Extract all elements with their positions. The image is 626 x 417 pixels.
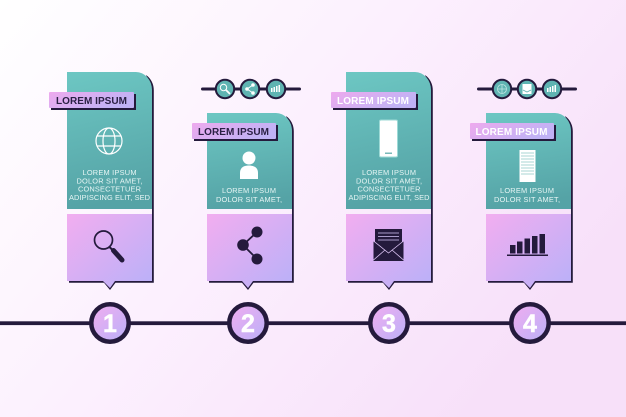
mini icon: share xyxy=(241,80,259,98)
body text 2 xyxy=(216,186,282,204)
number 2 xyxy=(229,304,267,342)
body text 4 xyxy=(494,186,560,204)
body text 3: ADIPISCING ELIT, SED xyxy=(348,193,430,202)
pink bottom 3 xyxy=(346,214,431,288)
icon: envelope xyxy=(374,229,404,261)
pink bottom 2 xyxy=(207,214,292,288)
timeline line xyxy=(0,321,626,325)
card shadow 2 xyxy=(209,116,294,290)
number 3: 3 xyxy=(382,310,396,338)
body text 1: ADIPISCING ELIT, SED xyxy=(69,193,150,202)
card shadow 1 xyxy=(69,75,154,290)
icon: magnifier xyxy=(94,231,122,260)
icon: document xyxy=(520,150,536,182)
body text 3 xyxy=(348,168,430,202)
body text 3: LOREM IPSUM xyxy=(362,168,416,177)
label 4: LOREM IPSUM xyxy=(476,127,548,138)
number 1: 1 xyxy=(103,310,117,338)
mini icon: bars xyxy=(267,80,285,98)
label 2 xyxy=(192,123,278,141)
icon: person xyxy=(240,152,258,179)
number 2: 2 xyxy=(241,310,255,338)
body text 4: LOREM IPSUM xyxy=(500,186,554,195)
body text 1: CONSECTETUER xyxy=(78,185,141,194)
mini icon: mail xyxy=(518,80,536,98)
body text 2: LOREM IPSUM xyxy=(222,186,276,195)
number 4 xyxy=(511,304,549,342)
body text 3: DOLOR SIT AMET, xyxy=(356,176,422,185)
label 2: LOREM IPSUM xyxy=(198,127,269,138)
icon: bar chart xyxy=(507,234,548,256)
panel: step 3 xyxy=(331,72,433,342)
number 4: 4 xyxy=(523,310,537,338)
label 4 xyxy=(470,123,556,141)
body text 1 xyxy=(69,168,150,202)
number 3 xyxy=(370,304,408,342)
icon: globe xyxy=(96,128,122,154)
label 1 xyxy=(49,92,136,110)
pink bottom 1 xyxy=(67,214,152,288)
teal top 1 xyxy=(67,72,152,209)
teal top 2 xyxy=(207,113,292,209)
label 1: LOREM IPSUM xyxy=(56,96,127,107)
mini icon: globe xyxy=(493,80,511,98)
panel: step 2 xyxy=(192,113,294,342)
card shadow 4 xyxy=(488,116,573,290)
mini icon row: step 4 xyxy=(477,80,577,98)
mini icon: bars xyxy=(543,80,561,98)
mini icon: search xyxy=(216,80,234,98)
number 1 xyxy=(91,304,129,342)
body text 3: CONSECTETUER xyxy=(358,185,420,194)
label 3: LOREM IPSUM xyxy=(337,96,409,107)
panel: step 1 xyxy=(49,72,154,342)
pink bottom 4 xyxy=(486,214,571,288)
icon: phone xyxy=(380,120,398,157)
label 3 xyxy=(331,92,418,110)
card shadow 3 xyxy=(348,75,433,290)
panel: step 4 xyxy=(470,113,573,342)
mini icon row: step 2 xyxy=(201,80,301,98)
body text 4: DOLOR SIT AMET, xyxy=(494,195,560,204)
icon: share xyxy=(238,227,262,264)
teal top 3 xyxy=(346,72,431,209)
body text 1: LOREM IPSUM xyxy=(82,168,136,177)
body text 2: DOLOR SIT AMET, xyxy=(216,195,282,204)
teal top 4 xyxy=(486,113,571,209)
body text 1: DOLOR SIT AMET, xyxy=(76,176,142,185)
